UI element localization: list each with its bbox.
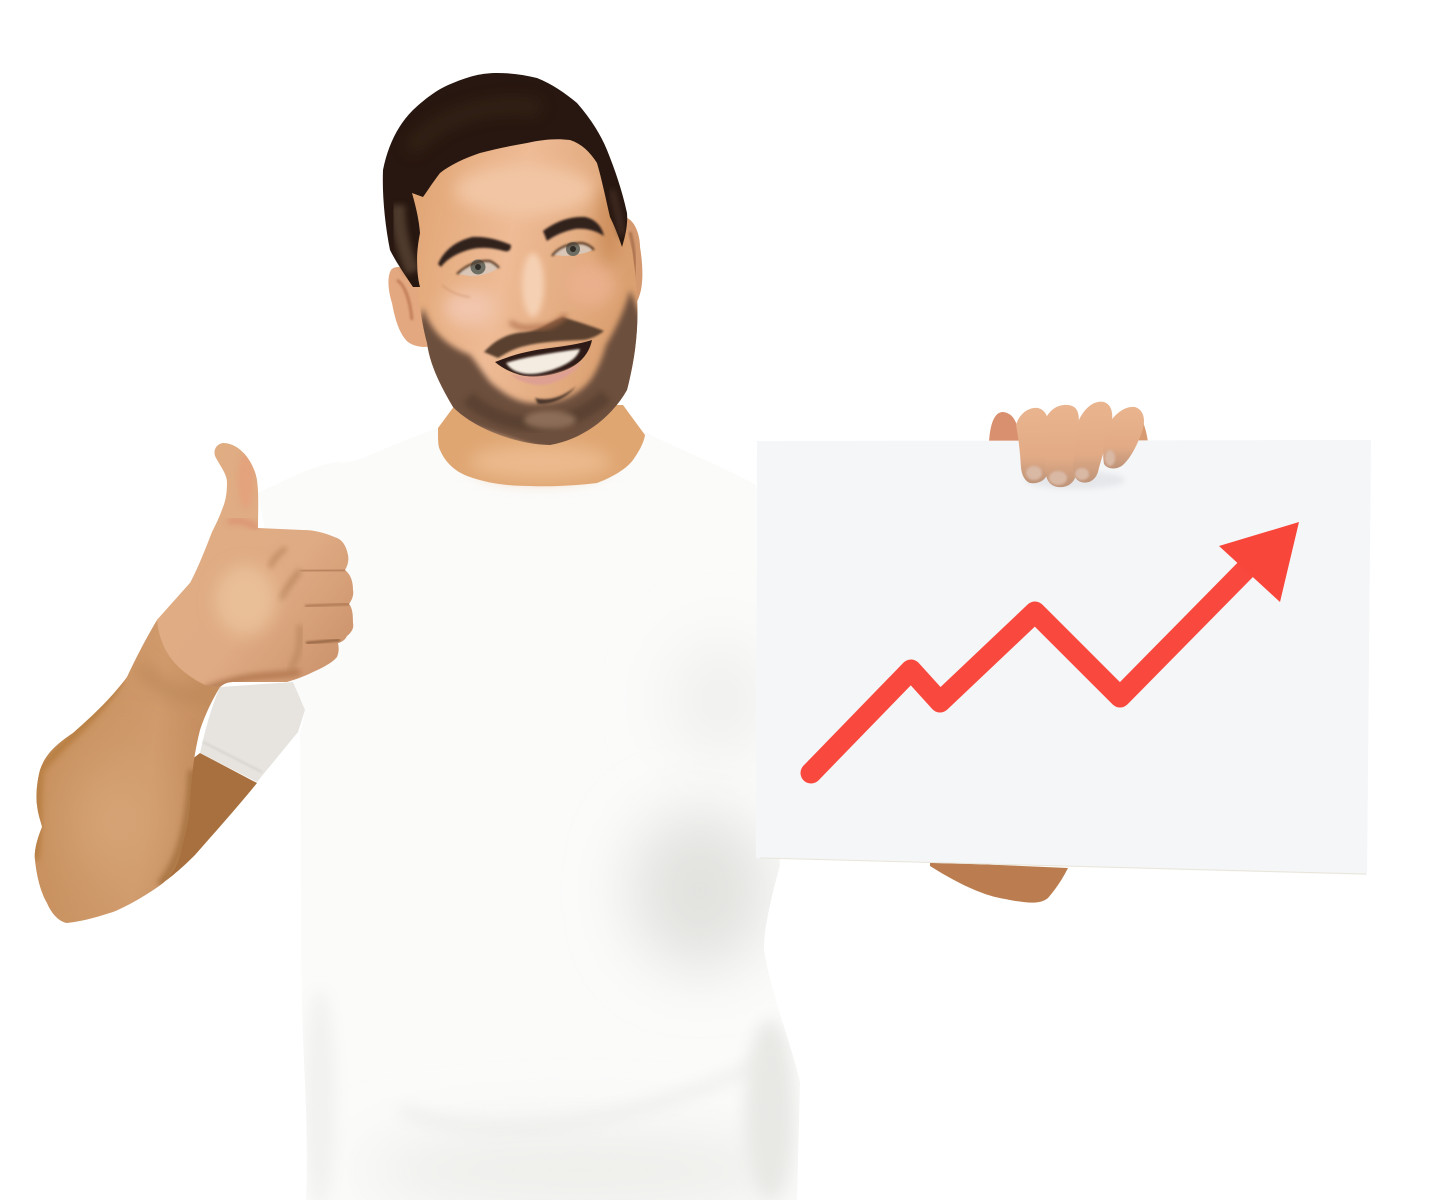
left eyebrow <box>438 237 511 267</box>
finger 4 <box>1103 407 1144 468</box>
lower arm behind sign <box>930 862 1068 903</box>
t-shirt <box>303 632 800 1200</box>
t-shirt sleeve <box>200 682 305 782</box>
finger 3 <box>1073 402 1112 483</box>
left eye <box>457 260 499 276</box>
left ear <box>388 267 430 347</box>
finger 1 <box>1016 408 1049 483</box>
cheek wrinkles <box>442 285 470 297</box>
moustache <box>484 317 604 358</box>
face <box>412 139 638 445</box>
hair <box>383 73 627 287</box>
right eye <box>552 242 594 256</box>
mouth <box>495 340 592 385</box>
forearm <box>34 583 220 923</box>
nose <box>510 315 566 328</box>
red upward arrow line chart <box>811 522 1299 773</box>
right eyebrow <box>543 217 604 241</box>
arrowhead <box>1219 522 1299 602</box>
fingers behind sign <box>989 412 1148 442</box>
finger 2 <box>1045 405 1079 487</box>
upper arm <box>140 753 257 892</box>
beard <box>420 290 638 445</box>
sign board <box>756 440 1371 875</box>
right ear <box>622 217 642 306</box>
hand gripping sign <box>1016 402 1144 489</box>
neck <box>438 405 645 486</box>
fist with raised thumb <box>157 443 353 690</box>
